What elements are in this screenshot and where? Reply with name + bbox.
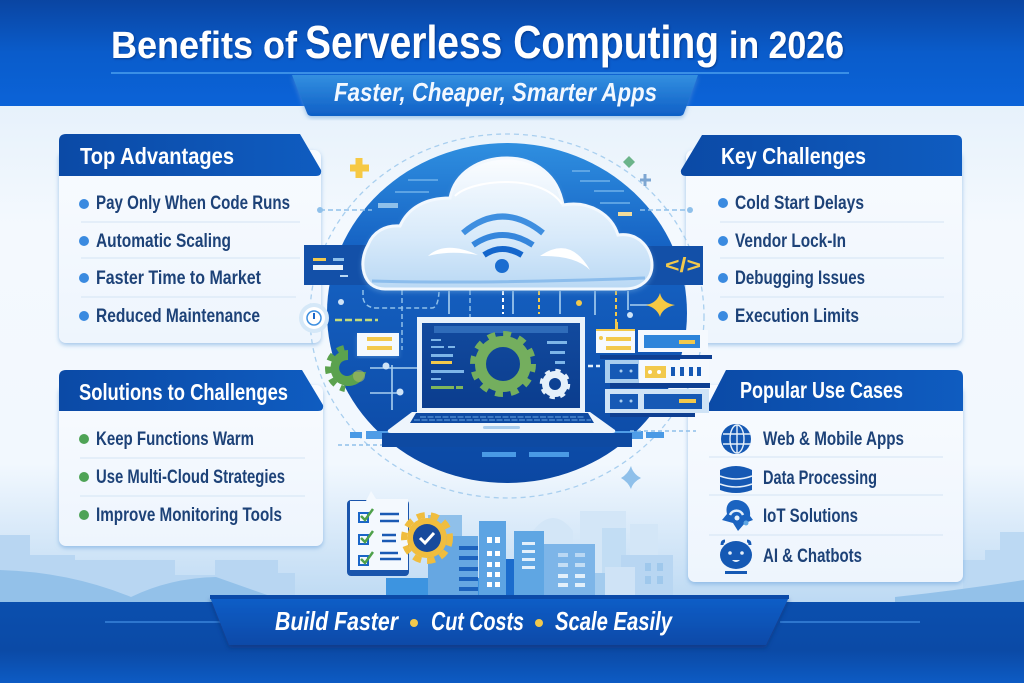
panel: solutions to challenges: Improve Monitoring Tools xyxy=(96,505,282,526)
panel: key challenges: Key Challenges xyxy=(721,143,866,169)
panel: key challenges xyxy=(681,135,962,343)
panel: solutions to challenges: Use Multi-Cloud Strategies xyxy=(96,467,285,488)
panel: key challenges: Debugging Issues xyxy=(735,268,865,289)
panel: popular use cases: Data Processing xyxy=(763,468,877,489)
panel: key challenges: Execution Limits xyxy=(735,306,859,327)
footer tagline xyxy=(275,606,673,636)
yellow note right xyxy=(596,322,635,353)
page background xyxy=(0,100,1024,605)
title: Serverless Computing xyxy=(305,16,719,68)
green gear on screen xyxy=(473,334,533,394)
title xyxy=(111,16,844,68)
white gear on screen xyxy=(542,371,568,397)
header band xyxy=(0,0,1024,106)
decorative plus blue xyxy=(640,174,651,186)
panel header xyxy=(681,135,962,176)
panel: top advantages: Faster Time to Market xyxy=(96,268,262,289)
panel: popular use cases xyxy=(688,370,963,582)
panel: top advantages: Automatic Scaling xyxy=(96,231,231,252)
laptop base and keyboard xyxy=(388,412,615,433)
green gear left xyxy=(328,348,366,389)
footer tagline: Build Faster xyxy=(275,606,400,636)
subtitle banner: Faster, Cheaper, Smarter Apps xyxy=(334,77,657,107)
left dark code bar xyxy=(304,245,374,285)
city skyline and hills xyxy=(0,511,1024,603)
panel: key challenges: Vendor Lock-In xyxy=(735,231,846,252)
footer tagline: Scale Easily xyxy=(555,606,673,636)
server stack xyxy=(588,330,712,417)
decorative green diamond xyxy=(623,156,635,168)
panel: top advantages: Reduced Maintenance xyxy=(96,306,260,327)
panel: top advantages: Pay Only When Code Runs xyxy=(96,193,290,214)
footer banner xyxy=(210,597,789,645)
panel header xyxy=(59,370,323,411)
icon: globe xyxy=(721,424,751,454)
panel: solutions to challenges: Keep Functions Warm xyxy=(96,429,254,450)
panel header xyxy=(705,370,963,411)
panel header xyxy=(59,134,321,176)
subtitle banner xyxy=(292,75,698,116)
right dark code bar: </> xyxy=(665,255,701,277)
clock node xyxy=(299,303,329,333)
panel: popular use cases: Popular Use Cases xyxy=(740,377,903,403)
central circle illustration xyxy=(310,134,704,498)
decorative blue diamond xyxy=(621,466,641,489)
footer tagline: Cut Costs xyxy=(431,606,524,636)
footer band xyxy=(0,602,1024,683)
panel: popular use cases: AI & Chatbots xyxy=(763,546,862,567)
panel: solutions to challenges xyxy=(59,370,323,546)
right dark code bar xyxy=(640,246,703,285)
icon: chatbot xyxy=(720,541,752,574)
title: in 2026 xyxy=(729,25,844,67)
decorative plus yellow xyxy=(350,158,369,178)
panel: top advantages xyxy=(59,134,321,343)
panel: key challenges: Cold Start Delays xyxy=(735,193,864,214)
panel: popular use cases: IoT Solutions xyxy=(763,506,858,527)
panel: top advantages: Top Advantages xyxy=(80,143,234,169)
laptop xyxy=(382,317,632,447)
yellow gear with check xyxy=(404,515,450,561)
panel: popular use cases: Web & Mobile Apps xyxy=(763,429,904,450)
yellow note left xyxy=(357,333,399,356)
icon: IoT xyxy=(722,500,753,531)
yellow star xyxy=(646,293,675,317)
panel: solutions to challenges: Solutions to Challenges xyxy=(79,379,288,405)
cloud with wifi icon xyxy=(363,158,652,289)
title: Benefits of xyxy=(111,25,297,67)
checklist and yellow gear xyxy=(347,491,450,576)
icon: database xyxy=(720,466,752,493)
